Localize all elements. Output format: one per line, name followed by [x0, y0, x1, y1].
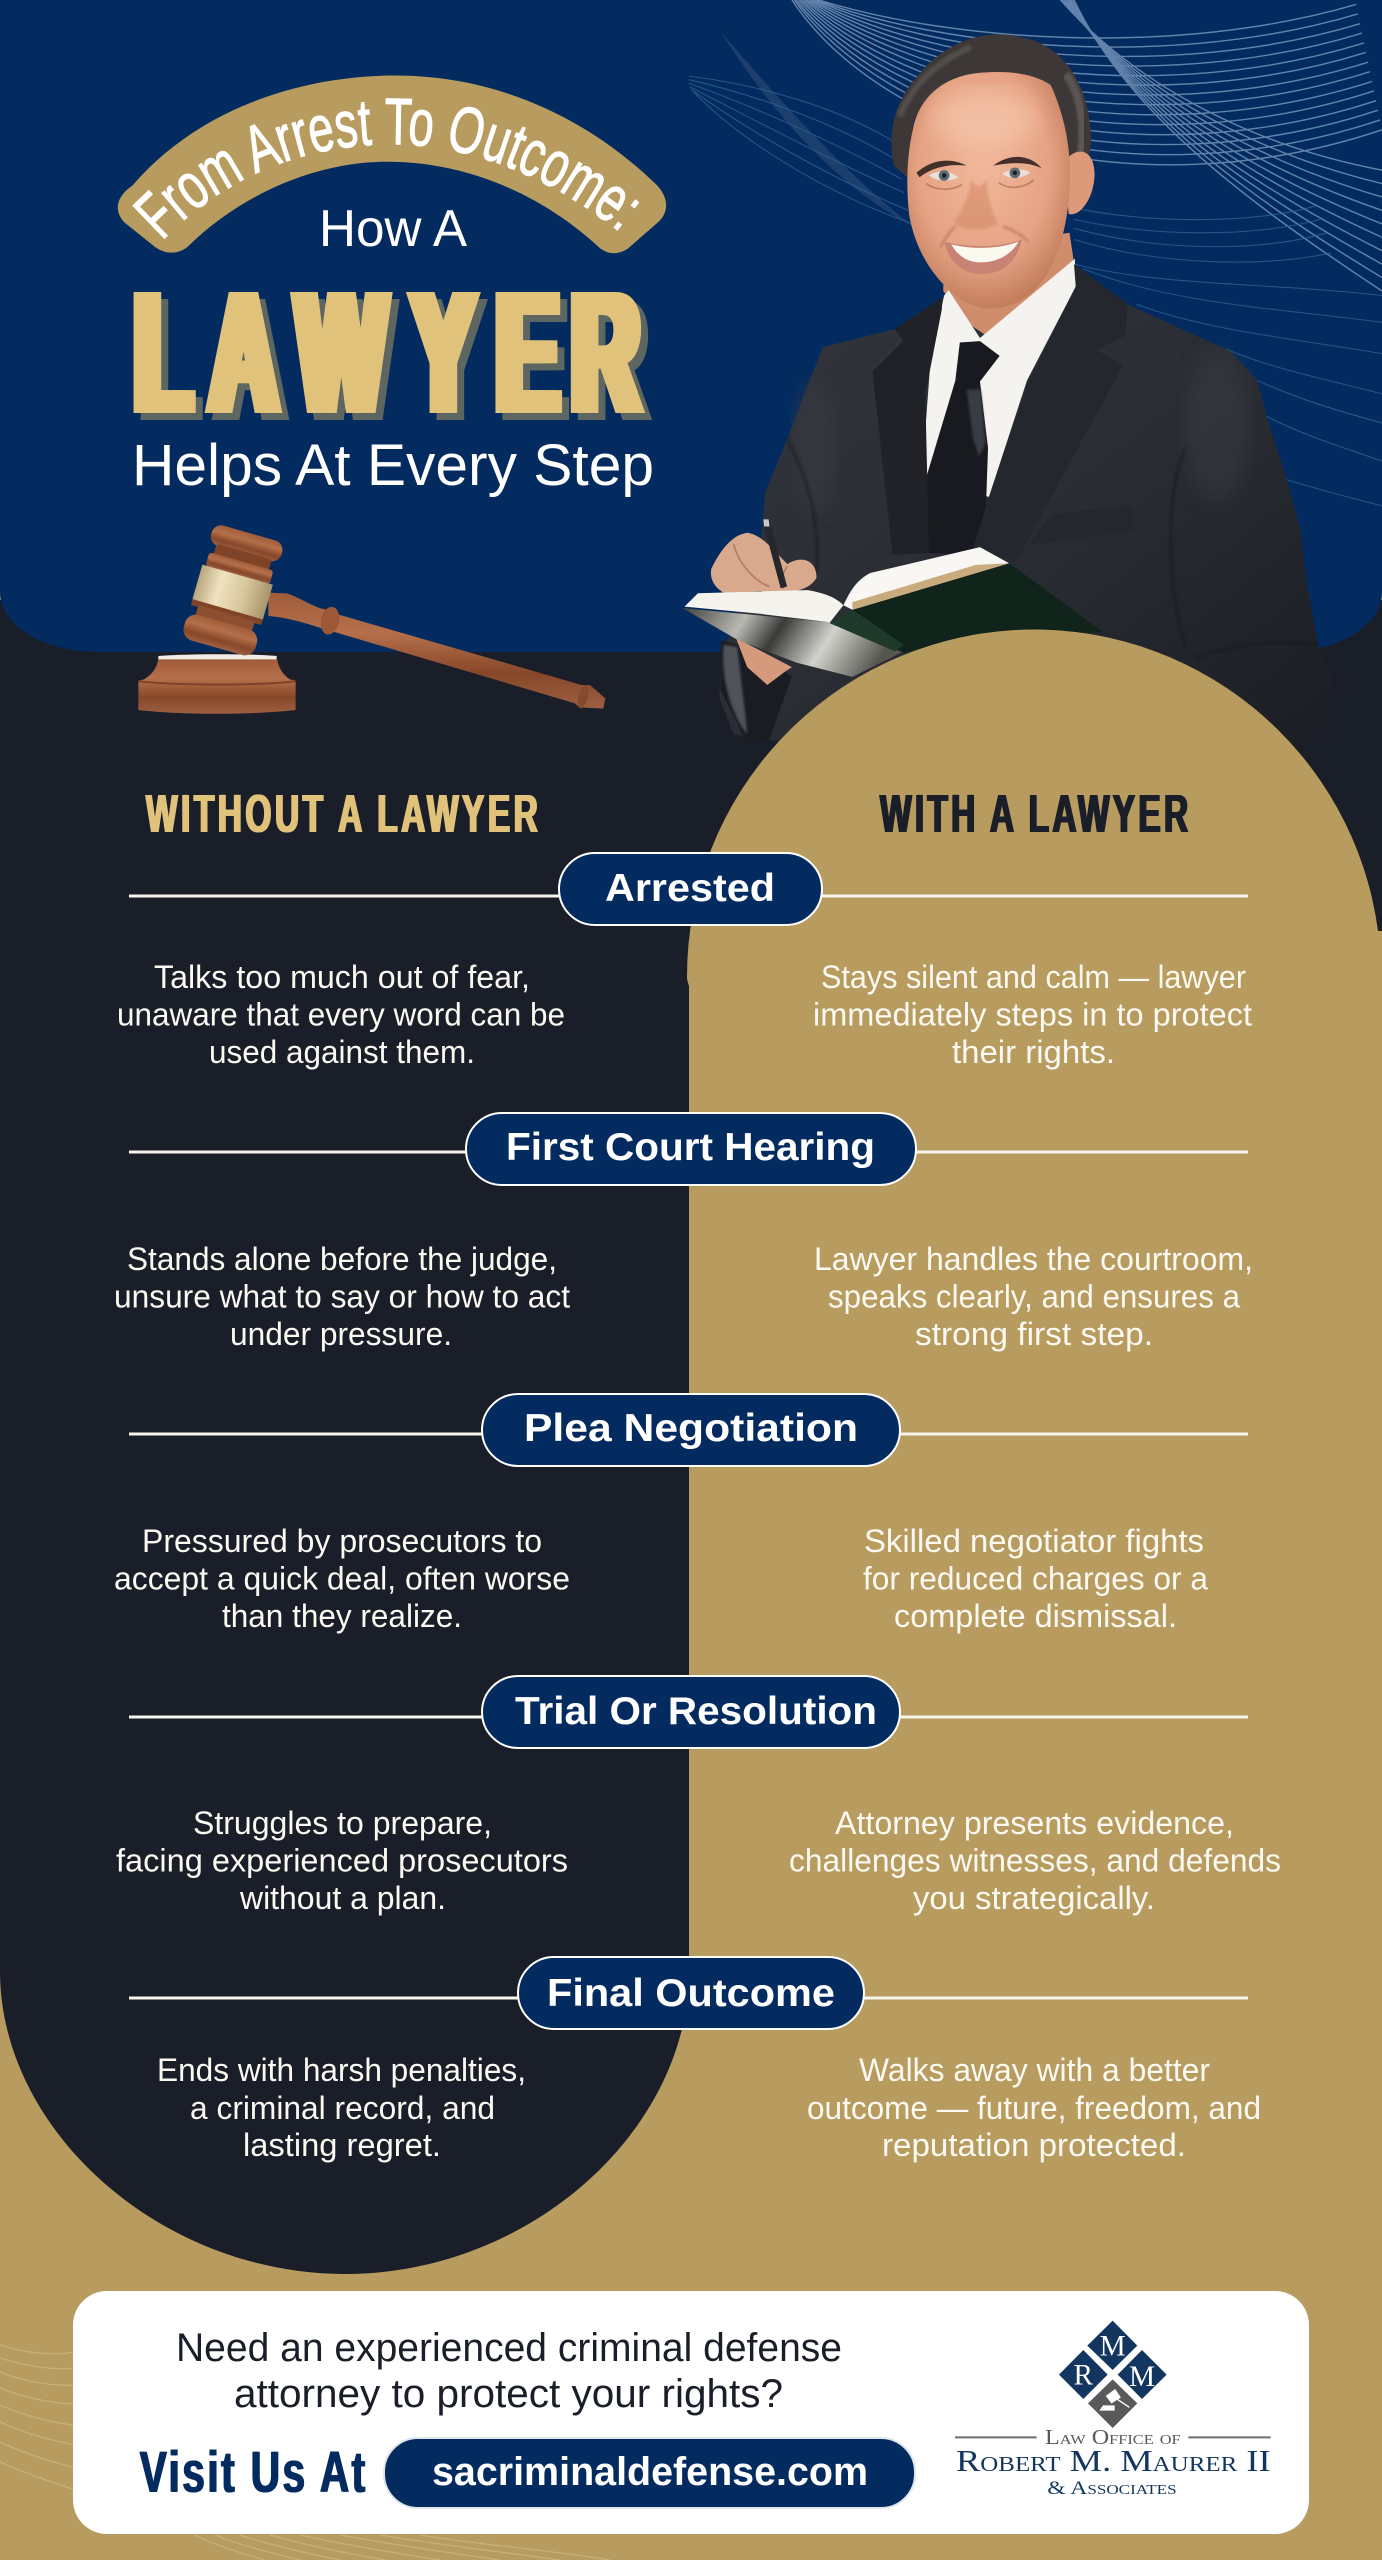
text: without lawyer, court hearing [114, 1241, 570, 1352]
logo text [956, 2427, 1271, 2499]
pill: first court hearing [466, 1113, 916, 1185]
pill: arrested [559, 853, 822, 925]
text: with lawyer, plea: Skilled negotiator fights [864, 1523, 1204, 1559]
text: with lawyer, plea: complete dismissal. [894, 1598, 1177, 1634]
ear [1065, 152, 1095, 214]
title: lawyer: LAWYER [147, 266, 652, 455]
text: without lawyer, plea: Pressured by prosecutors to [142, 1523, 542, 1559]
pill: trial or resolution [482, 1676, 900, 1748]
pill: plea negotiation [482, 1394, 900, 1466]
logo: Law Office of Robert M. Maurer II [955, 2321, 1271, 2499]
text: without lawyer, court hearing: under pressure. [230, 1316, 452, 1352]
visit us label: Visit Us At [139, 2440, 365, 2505]
text: without lawyer, trial: facing experienced prosecutors [116, 1842, 568, 1878]
text: without lawyer, arrested: unaware that every word can be [117, 996, 565, 1032]
step 3: plea negotiation [114, 1394, 1248, 1634]
title: helps at every step: Helps At Every Step [132, 433, 654, 498]
step 2: first court hearing [114, 1113, 1253, 1352]
text: without lawyer, arrested: used against them. [209, 1034, 475, 1070]
logo text: & Associates [1047, 2478, 1177, 2499]
step 5: final outcome [129, 1957, 1261, 2163]
face [907, 72, 1070, 308]
eyebrows [916, 157, 1042, 177]
pill: plea negotiation: Plea Negotiation [524, 1407, 858, 1450]
text: without lawyer, outcome: lasting regret. [243, 2127, 441, 2163]
text: with lawyer, court hearing: speaks clearly, and ensures a [828, 1278, 1240, 1314]
text: without lawyer, outcome: Ends with harsh penalties, [157, 2052, 526, 2088]
title: lawyer: LAWYER [135, 266, 640, 455]
text: without lawyer, trial: Struggles to prepare, [193, 1805, 492, 1841]
text: with lawyer, outcome [807, 2052, 1261, 2163]
pill: arrested: Arrested [605, 867, 775, 910]
logo diamonds: R [1074, 2360, 1094, 2392]
shirt [925, 259, 1076, 497]
column heading: with a lawyer: WITH A LAWYER [879, 783, 1187, 844]
text: with lawyer, trial [789, 1805, 1281, 1916]
title ribbon: From Arrest To Outcome: [132, 98, 640, 240]
pen [766, 520, 784, 587]
necktie [927, 341, 1000, 555]
step 1: arrested [117, 853, 1252, 1070]
column heading: without a lawyer: WITHOUT A LAWYER [147, 783, 539, 844]
decorative wave lines [689, 0, 1382, 506]
title: lawyer: LAWYER [134, 259, 639, 448]
call to action question [176, 2326, 842, 2416]
title: lawyer: LAWYER [140, 259, 645, 448]
logo text: Law Office of [1045, 2427, 1181, 2449]
text: with lawyer, plea: for reduced charges or a [863, 1560, 1208, 1596]
title: lawyer: LAWYER [128, 259, 633, 448]
text: with lawyer, arrested: their rights. [952, 1034, 1115, 1070]
column heading: without a lawyer: WITHOUT A LAWYER [145, 783, 537, 844]
website pill [384, 2438, 915, 2508]
text: with lawyer, plea [863, 1523, 1208, 1634]
text: with lawyer, trial: you strategically. [913, 1880, 1155, 1916]
text: without lawyer, arrested: Talks too much out of fear, [154, 959, 530, 995]
hand [711, 533, 817, 593]
visit us label: Visit Us At [140, 2440, 366, 2505]
text: with lawyer, arrested: Stays silent and calm — lawyer [821, 959, 1246, 995]
text: with lawyer, court hearing [814, 1241, 1253, 1352]
suit jacket [719, 264, 1333, 752]
logo text: Robert M. Maurer II [956, 2444, 1271, 2478]
text: with lawyer, outcome: reputation protected. [882, 2127, 1186, 2163]
text: without lawyer, arrested [117, 959, 565, 1070]
logo diamonds: M [1100, 2331, 1126, 2363]
sleeve with shine [720, 640, 792, 743]
website pill: sacriminaldefense.com [432, 2450, 868, 2494]
call to action question: Need an experienced criminal defense [176, 2326, 842, 2370]
portrait: smiling lawyer holding a book [682, 34, 1333, 752]
step 4: trial or resolution [116, 1676, 1281, 1916]
logo diamonds: M [1129, 2361, 1155, 2393]
text: with lawyer, court hearing: strong first step. [915, 1316, 1153, 1352]
icon: gavel [138, 523, 605, 714]
hair [891, 34, 1091, 180]
text: without lawyer, trial [116, 1805, 568, 1916]
text: with lawyer, outcome: Walks away with a better [859, 2052, 1210, 2088]
text: without lawyer, trial: without a plan. [239, 1880, 446, 1916]
call to action question: attorney to protect your rights? [234, 2372, 783, 2416]
text: with lawyer, outcome: outcome — future, freedom, and [807, 2090, 1261, 2126]
title: lawyer: LAWYER [141, 266, 646, 455]
pill: first court hearing: First Court Hearing [506, 1126, 875, 1169]
title: how a: How A [319, 200, 467, 258]
jacket lapels [873, 298, 942, 555]
title block [118, 76, 666, 498]
pill: trial or resolution: Trial Or Resolution [515, 1690, 877, 1733]
text: with lawyer, trial: Attorney presents evidence, [835, 1805, 1234, 1841]
text: without lawyer, court hearing: Stands alone before the judge, [127, 1241, 557, 1277]
book [682, 547, 1103, 677]
nose [954, 179, 998, 230]
smile [944, 240, 1022, 274]
text: without lawyer, outcome: a criminal record, and [190, 2090, 495, 2126]
column heading: with a lawyer: WITH A LAWYER [881, 783, 1189, 844]
text: without lawyer, court hearing: unsure what to say or how to act [114, 1278, 570, 1314]
text: without lawyer, plea: than they realize. [222, 1598, 462, 1634]
pill: final outcome [518, 1957, 864, 2029]
pill: final outcome: Final Outcome [547, 1972, 835, 2015]
jacket pocket and sleeve folds [1028, 506, 1133, 545]
call to action panel [73, 2291, 1309, 2534]
wrist [736, 638, 792, 685]
decorative lines on gold footer [0, 2345, 610, 2560]
header panel [0, 0, 1382, 652]
text: without lawyer, outcome [157, 2052, 526, 2163]
text: with lawyer, court hearing: Lawyer handles the courtroom, [814, 1241, 1253, 1277]
text: without lawyer, plea [114, 1523, 570, 1634]
eyes [929, 169, 1030, 180]
dark panel: without a lawyer [0, 600, 1382, 2274]
neck [943, 233, 1075, 340]
text: with lawyer, arrested [813, 959, 1252, 1070]
text: without lawyer, plea: accept a quick deal, often worse [114, 1560, 570, 1596]
text: with lawyer, trial: challenges witnesses, and defends [789, 1842, 1281, 1878]
text: with lawyer, arrested: immediately steps in to protect [813, 996, 1252, 1032]
logo diamonds [1059, 2321, 1167, 2428]
gold panel: with a lawyer [687, 630, 1382, 2560]
